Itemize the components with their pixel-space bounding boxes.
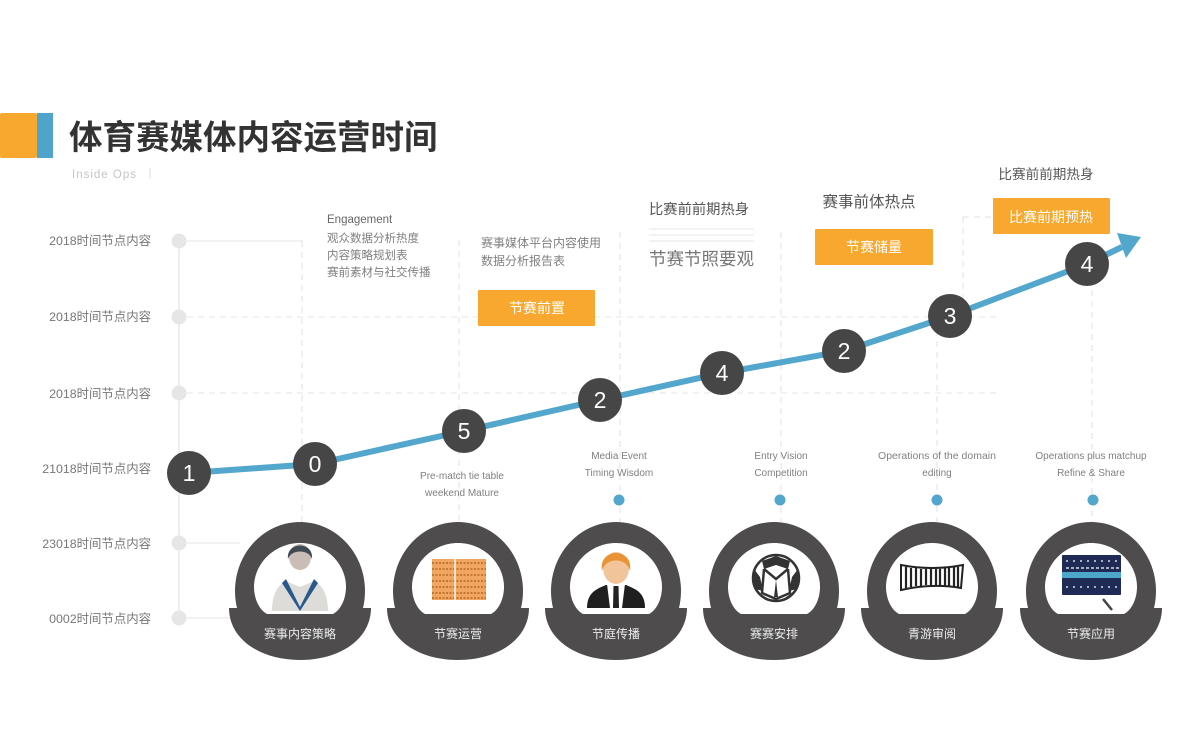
- callout: second orange tag: 节赛储量: [846, 239, 902, 255]
- text block: pre-match warm up: 比赛前前期热身: [649, 201, 749, 218]
- y axis with time labels: [42, 233, 1000, 626]
- step captions: Refine & Share: [1057, 468, 1125, 479]
- callout: third orange tag: 比赛前期预热: [1009, 209, 1093, 225]
- text block: note above callout: 数据分析报告表: [481, 253, 565, 268]
- badge 3: person in suit: [545, 522, 687, 660]
- blue connector dots: [614, 494, 1098, 506]
- callout: first orange tag: [478, 290, 595, 326]
- step captions: Entry Vision: [754, 451, 808, 462]
- step captions: Operations of the domain: [878, 450, 996, 462]
- step captions: Operations plus matchup: [1035, 451, 1147, 462]
- subtitle: Inside Ops: [72, 169, 137, 181]
- numbered timeline nodes: 4: [1081, 251, 1094, 277]
- callout: third orange tag: 比赛前前期热身: [998, 166, 1094, 182]
- badge 6: data screen: [1020, 522, 1162, 660]
- step captions: Timing Wisdom: [585, 468, 653, 479]
- numbered timeline nodes: 1: [183, 460, 195, 486]
- header accent block: [0, 113, 53, 158]
- callout: first orange tag: 节赛前置: [509, 300, 565, 316]
- y axis with time labels: 2018时间节点内容: [49, 386, 151, 401]
- y axis with time labels: 21018时间节点内容: [42, 461, 151, 476]
- numbered timeline nodes: 4: [716, 360, 729, 386]
- step captions: [420, 450, 1147, 499]
- text block: note above callout: [481, 235, 601, 268]
- text block: intro notes: 观众数据分析热度: [327, 231, 419, 245]
- step captions: Competition: [754, 468, 808, 479]
- step captions: editing: [922, 468, 952, 479]
- text block: note above callout: 赛事媒体平台内容使用: [481, 235, 601, 250]
- numbered timeline nodes: 5: [458, 418, 470, 444]
- y axis with time labels: 2018时间节点内容: [49, 309, 151, 324]
- callout: second orange tag: 赛事前体热点: [822, 192, 916, 211]
- title: 体育赛媒体内容运营时间: [69, 120, 438, 157]
- y axis with time labels: 2018时间节点内容: [49, 233, 151, 248]
- dashed guide lines: [302, 217, 1092, 522]
- trend line arrow: [189, 233, 1141, 473]
- callout: third orange tag: [993, 166, 1110, 234]
- badge 4: football: [703, 522, 845, 660]
- numbered timeline nodes: 0: [309, 451, 321, 477]
- badge 6: data screen: 节赛应用: [1067, 626, 1115, 641]
- step captions: Pre-match tie table: [420, 471, 504, 482]
- step captions: weekend Mature: [424, 488, 499, 499]
- text block: intro notes: 赛前素材与社交传播: [327, 265, 431, 279]
- badge 1: person in blue collar: [229, 522, 371, 660]
- text block: pre-match warm up: [649, 201, 754, 269]
- badge 2: orange schedule grid: [387, 522, 529, 660]
- text block: intro notes: Engagement: [327, 214, 393, 226]
- badge 5: barcode stadium: 青游审阅: [908, 626, 956, 641]
- badge 2: orange schedule grid: 节赛运营: [434, 626, 482, 641]
- numbered timeline nodes: 2: [594, 387, 606, 413]
- y axis with time labels: 0002时间节点内容: [49, 611, 151, 626]
- text block: pre-match warm up: 节赛节照要观: [649, 249, 754, 269]
- badge 3: person in suit: 节庭传播: [592, 626, 640, 641]
- badge 5: barcode stadium: [861, 522, 1003, 660]
- text block: intro notes: 内容策略规划表: [327, 248, 408, 262]
- badge 1: person in blue collar: 赛事内容策略: [264, 626, 336, 641]
- y axis with time labels: 23018时间节点内容: [42, 536, 151, 551]
- badge 4: football: 赛赛安排: [750, 626, 798, 641]
- text block: intro notes: [327, 214, 431, 279]
- numbered timeline nodes: [167, 242, 1109, 495]
- step captions: Media Event: [591, 451, 647, 462]
- numbered timeline nodes: 3: [944, 303, 956, 329]
- callout: second orange tag: [815, 192, 933, 265]
- numbered timeline nodes: 2: [838, 338, 850, 364]
